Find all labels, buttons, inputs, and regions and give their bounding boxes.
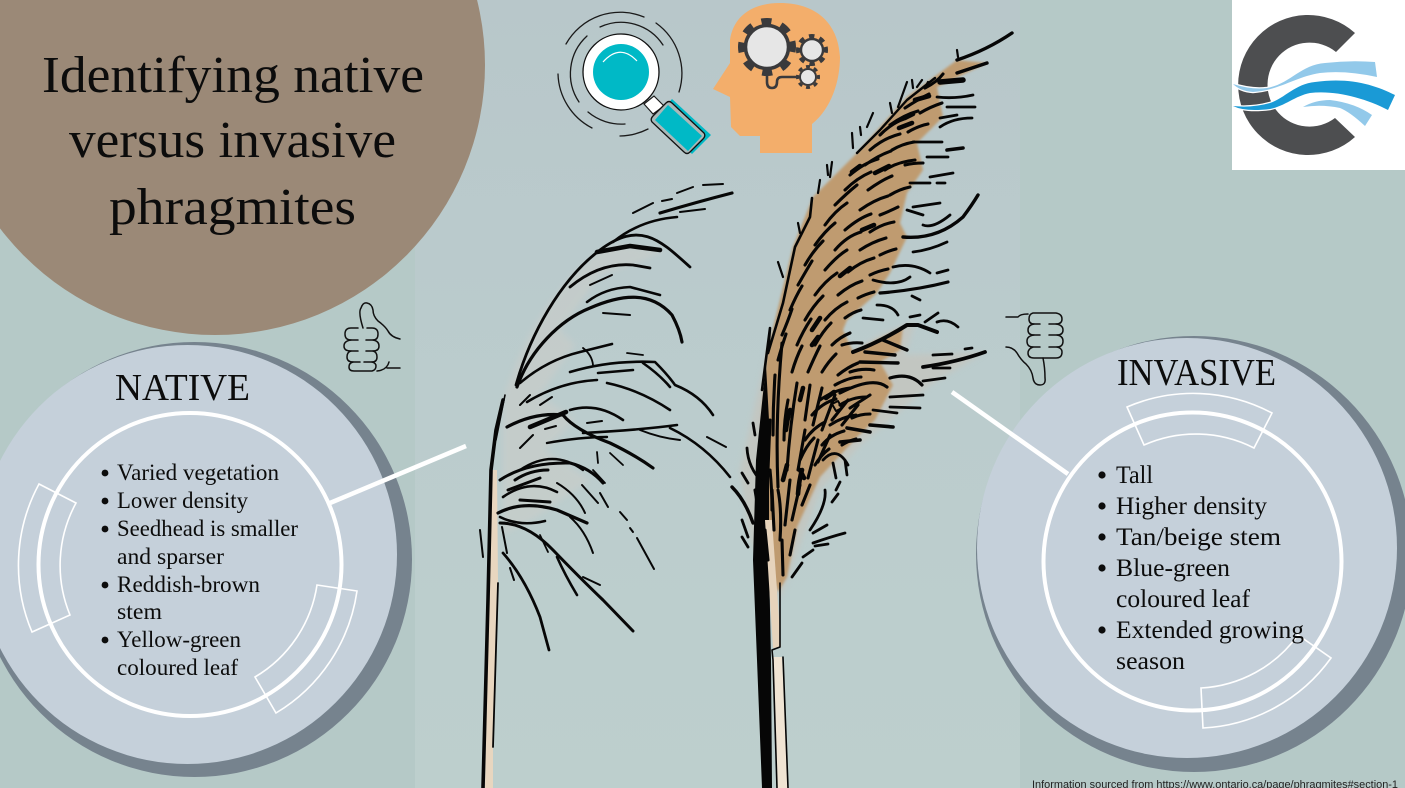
- icon: thumbs up: [344, 303, 400, 371]
- title: versus invasive: [69, 112, 396, 169]
- title circle: [0, 0, 485, 335]
- invasive thick shadow stem: [753, 365, 772, 788]
- icon: head with gears: [713, 3, 840, 153]
- invasive tan seedhead body: [760, 60, 987, 592]
- title: [42, 47, 424, 236]
- icon: thumbs down: [1006, 313, 1063, 385]
- logo: [1232, 0, 1405, 170]
- grey haze around invasive seedhead: [740, 322, 985, 600]
- invasive interior strands: [755, 74, 943, 575]
- native list: [102, 460, 298, 680]
- title: Identifying native: [42, 47, 424, 104]
- invasive fringe strands: [732, 33, 1012, 577]
- native list: coloured leaf: [117, 655, 238, 680]
- native list: Yellow-green: [117, 627, 241, 652]
- invasive list: Tall: [1116, 462, 1153, 489]
- native list: Seedhead is smaller: [117, 516, 298, 541]
- native list: stem: [117, 599, 162, 624]
- invasive list: season: [1116, 648, 1186, 675]
- invasive heading: INVASIVE: [1117, 352, 1276, 394]
- native stem: [483, 395, 505, 788]
- native list: Reddish-brown: [117, 572, 260, 597]
- invasive list: Higher density: [1116, 493, 1268, 520]
- invasive inner ring: [1044, 412, 1342, 710]
- haze behind native seedhead: [503, 245, 665, 535]
- native list: Lower density: [117, 488, 248, 513]
- icon: magnifying glass: [558, 12, 711, 154]
- invasive phragmites plant: [732, 33, 1012, 788]
- native seedhead strands: [480, 184, 732, 650]
- native list: and sparser: [117, 544, 224, 569]
- native phragmites plant: [480, 184, 732, 788]
- invasive list: Tan/beige stem: [1116, 524, 1282, 551]
- invasive list: [1098, 462, 1305, 675]
- invasive beige stem: [765, 520, 788, 788]
- invasive connector line: [952, 392, 1068, 474]
- native heading: NATIVE: [115, 367, 250, 409]
- native connector line: [330, 446, 466, 503]
- panel: native: [0, 342, 466, 777]
- invasive list: Blue-green: [1116, 555, 1231, 582]
- native list: Varied vegetation: [117, 460, 279, 485]
- photo panel backdrop: [415, 0, 1020, 788]
- invasive list: coloured leaf: [1116, 586, 1251, 613]
- invasive list: Extended growing: [1116, 617, 1305, 644]
- title: phragmites: [109, 179, 356, 236]
- panel: invasive: [952, 336, 1405, 772]
- native inner ring: [38, 413, 342, 716]
